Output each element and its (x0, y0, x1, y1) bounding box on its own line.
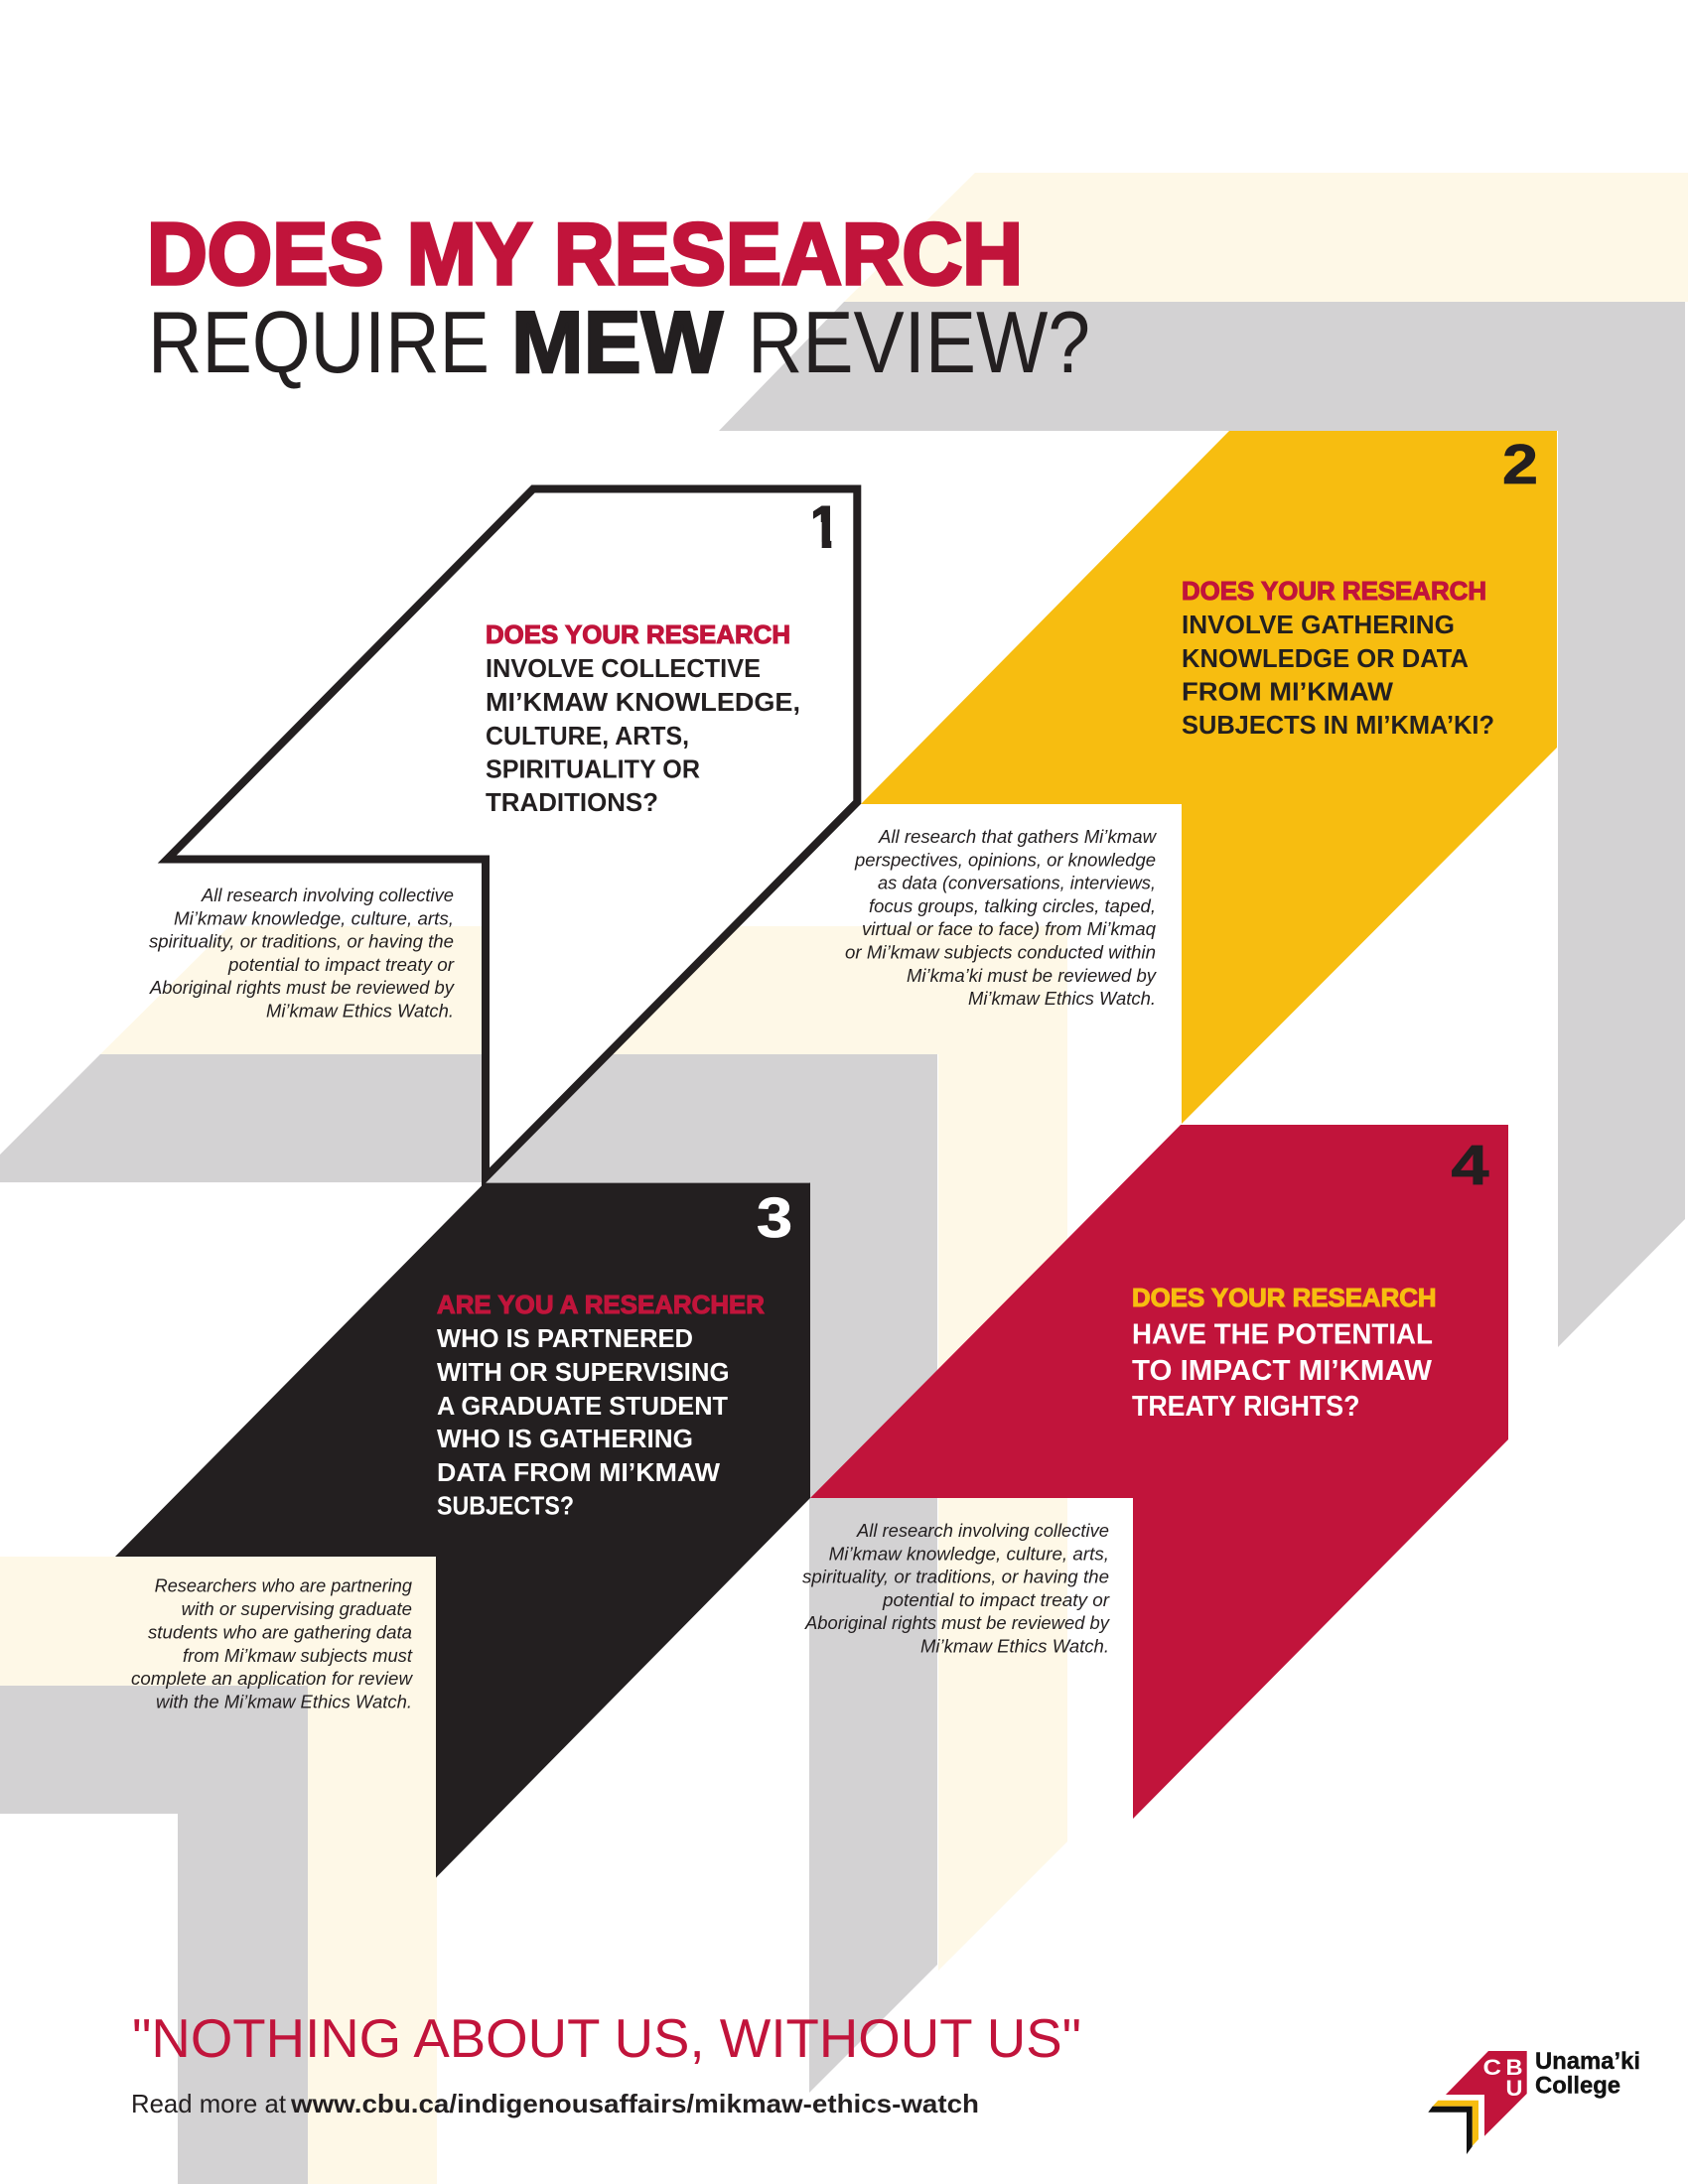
question 1 (486, 619, 800, 817)
question 2 (1182, 576, 1494, 740)
read more link: Read more at (131, 2089, 287, 2118)
explanation 2: as data (conversations, interviews, (878, 873, 1156, 893)
question 4: TREATY RIGHTS? (1132, 1391, 1360, 1423)
explanation 2: focus groups, talking circles, taped, (869, 895, 1156, 916)
explanation 1: potential to impact treaty or (227, 954, 455, 975)
explanation 3: complete an application for review (131, 1668, 414, 1689)
explanation 2: All research that gathers Mi’kmaw (878, 826, 1158, 847)
question 4: TO IMPACT MI’KMAW (1132, 1355, 1433, 1387)
question 3: WHO IS GATHERING (437, 1424, 693, 1453)
logo: Unama'ki College: B (1505, 2055, 1523, 2080)
explanation 2: or Mi’kmaw subjects conducted within (845, 941, 1156, 963)
question 3: A GRADUATE STUDENT (437, 1391, 728, 1421)
logo: Unama'ki College: C (1483, 2055, 1501, 2080)
question 2: SUBJECTS IN MI’KMA’KI? (1182, 710, 1494, 740)
explanation 1: Mi’kmaw Ethics Watch. (266, 1001, 454, 1021)
explanation 4: Mi’kmaw knowledge, culture, arts, (829, 1543, 1109, 1564)
explanation 2: perspectives, opinions, or knowledge (854, 849, 1156, 870)
explanation 4: spirituality, or traditions, or having the (802, 1567, 1109, 1587)
number 4: 4 (1452, 1134, 1489, 1197)
explanation 2: Mi’kma’ki must be reviewed by (907, 965, 1158, 986)
question 3: ARE YOU A RESEARCHER (437, 1290, 765, 1319)
question 1: TRADITIONS? (486, 787, 658, 817)
number 1: 1 (807, 494, 841, 561)
title: REVIEW? (748, 293, 1090, 391)
number 3: 3 (757, 1186, 792, 1250)
question 3 (437, 1290, 765, 1521)
explanation 2: Mi’kmaw Ethics Watch. (968, 988, 1156, 1009)
question 2: DOES YOUR RESEARCH (1182, 576, 1486, 606)
read more link: www.cbu.ca/indigenousaffairs/mikmaw-ethics-watch (290, 2089, 979, 2118)
explanation 4 (802, 1520, 1111, 1656)
explanation 3: with or supervising graduate (182, 1598, 412, 1619)
explanation 3: with the Mi’kmaw Ethics Watch. (156, 1691, 412, 1711)
question 2: FROM MI’KMAW (1182, 677, 1393, 707)
number 2: 2 (1502, 433, 1538, 496)
title: DOES MY RESEARCH (147, 205, 1023, 303)
panel 3: black arrow (115, 1183, 810, 1878)
question 2: INVOLVE GATHERING (1182, 610, 1455, 639)
explanation 1 (149, 885, 456, 1021)
question 1: CULTURE, ARTS, (486, 721, 689, 751)
question 1: DOES YOUR RESEARCH (486, 619, 790, 649)
explanation 1: spirituality, or traditions, or having the (149, 931, 454, 952)
explanation 1: Aboriginal rights must be reviewed by (149, 977, 456, 998)
logo: Unama'ki College: Unama’ki (1535, 2048, 1640, 2075)
question 1: MI’KMAW KNOWLEDGE, (486, 687, 800, 717)
question 2: KNOWLEDGE OR DATA (1182, 643, 1469, 673)
question 1: SPIRITUALITY OR (486, 754, 700, 784)
explanation 4: Aboriginal rights must be reviewed by (804, 1612, 1111, 1633)
explanation 4: All research involving collective (856, 1520, 1109, 1541)
logo: Unama'ki College: U (1505, 2076, 1523, 2101)
panel 1: outlined arrow (167, 488, 857, 1177)
slogan: "NOTHING ABOUT US, WITHOUT US" (132, 2007, 1081, 2069)
title (147, 205, 1090, 391)
explanation 4: Mi’kmaw Ethics Watch. (920, 1636, 1109, 1656)
question 3: WHO IS PARTNERED (437, 1323, 693, 1353)
panel 2: yellow arrow (861, 431, 1557, 1124)
question 3: WITH OR SUPERVISING (437, 1357, 729, 1387)
explanation 3: from Mi’kmaw subjects must (183, 1645, 413, 1666)
explanation 3: students who are gathering data (148, 1622, 412, 1642)
explanation 1: All research involving collective (201, 885, 454, 905)
question 3: DATA FROM MI’KMAW (437, 1457, 720, 1487)
title: REQUIRE (148, 293, 490, 391)
explanation 4: potential to impact treaty or (882, 1589, 1110, 1610)
explanation 3: Researchers who are partnering (155, 1575, 413, 1596)
title: MEW (511, 293, 723, 391)
explanation 1: Mi’kmaw knowledge, culture, arts, (174, 907, 454, 928)
question 1: INVOLVE COLLECTIVE (486, 653, 761, 683)
question 4: DOES YOUR RESEARCH (1132, 1283, 1436, 1312)
logo: Unama'ki College: College (1535, 2072, 1620, 2099)
question 4: HAVE THE POTENTIAL (1132, 1318, 1433, 1350)
explanation 3 (131, 1575, 414, 1711)
panel 4: red arrow (810, 1125, 1508, 1819)
question 3: SUBJECTS? (437, 1491, 574, 1521)
question 4 (1132, 1283, 1436, 1423)
logo: Unama'ki College (1428, 2048, 1640, 2154)
explanation 2: virtual or face to face) from Mi’kmaq (862, 918, 1157, 939)
explanation 2 (845, 826, 1158, 1009)
